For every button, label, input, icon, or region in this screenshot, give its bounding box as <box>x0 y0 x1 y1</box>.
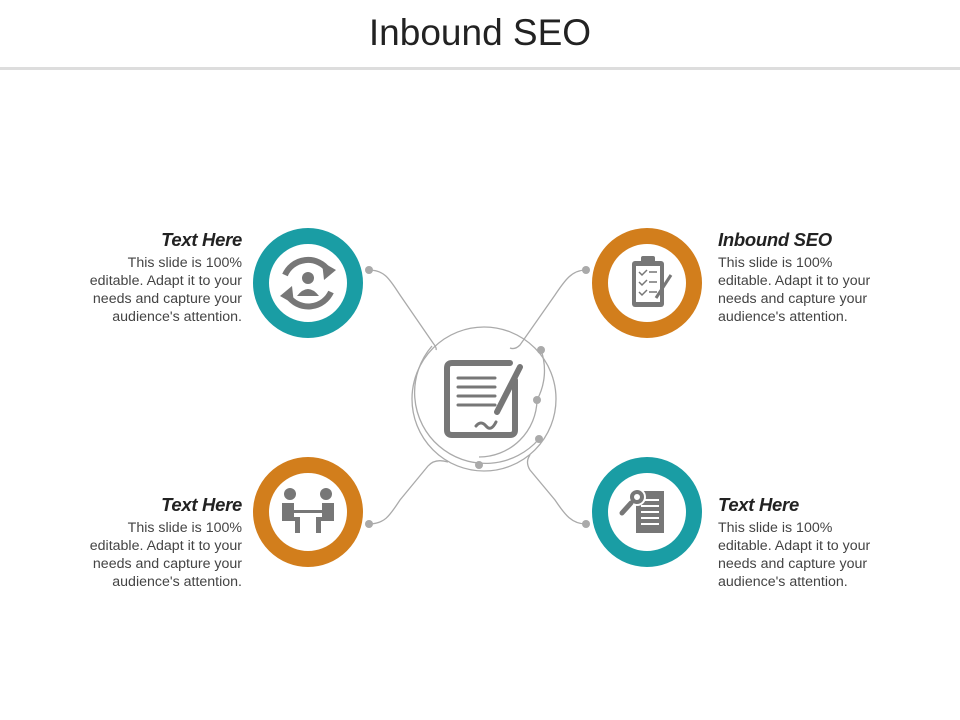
text: top right: Inbound SEO <box>718 229 832 250</box>
text: top right: This slide is 100% <box>718 255 832 271</box>
connectors <box>369 270 586 524</box>
text: top left: This slide is 100% <box>128 255 242 271</box>
text: top right <box>718 229 870 325</box>
text: top left: editable. Adapt it to your <box>90 273 242 289</box>
dots <box>365 266 590 528</box>
text: top right: needs and capture your <box>718 291 867 307</box>
text: top right: editable. Adapt it to your <box>718 273 870 289</box>
text: bottom left: needs and capture your <box>93 556 242 572</box>
text: bottom right: needs and capture your <box>718 556 867 572</box>
icon ring BL <box>261 465 355 559</box>
text: bottom left: editable. Adapt it to your <box>90 538 242 554</box>
text: top left: Text Here <box>161 229 242 250</box>
text: bottom left: audience's attention. <box>112 574 242 590</box>
text: bottom left: Text Here <box>161 494 242 515</box>
text: bottom right: This slide is 100% <box>718 520 832 536</box>
text: bottom right: editable. Adapt it to your <box>718 538 870 554</box>
text: bottom left <box>90 494 242 590</box>
text: bottom right: audience's attention. <box>718 574 848 590</box>
icon ring TL <box>261 236 355 330</box>
text: top right: audience's attention. <box>718 309 848 325</box>
text: top left: audience's attention. <box>112 309 242 325</box>
text: bottom right: Text Here <box>718 494 799 515</box>
text: top left: needs and capture your <box>93 291 242 307</box>
title: Inbound SEO <box>369 12 591 53</box>
icon: center document with pen <box>447 363 520 435</box>
text: top left <box>90 229 242 325</box>
icon ring BR <box>600 465 694 559</box>
text: bottom left: This slide is 100% <box>128 520 242 536</box>
text: bottom right <box>718 494 870 590</box>
icon ring TR <box>600 236 694 330</box>
